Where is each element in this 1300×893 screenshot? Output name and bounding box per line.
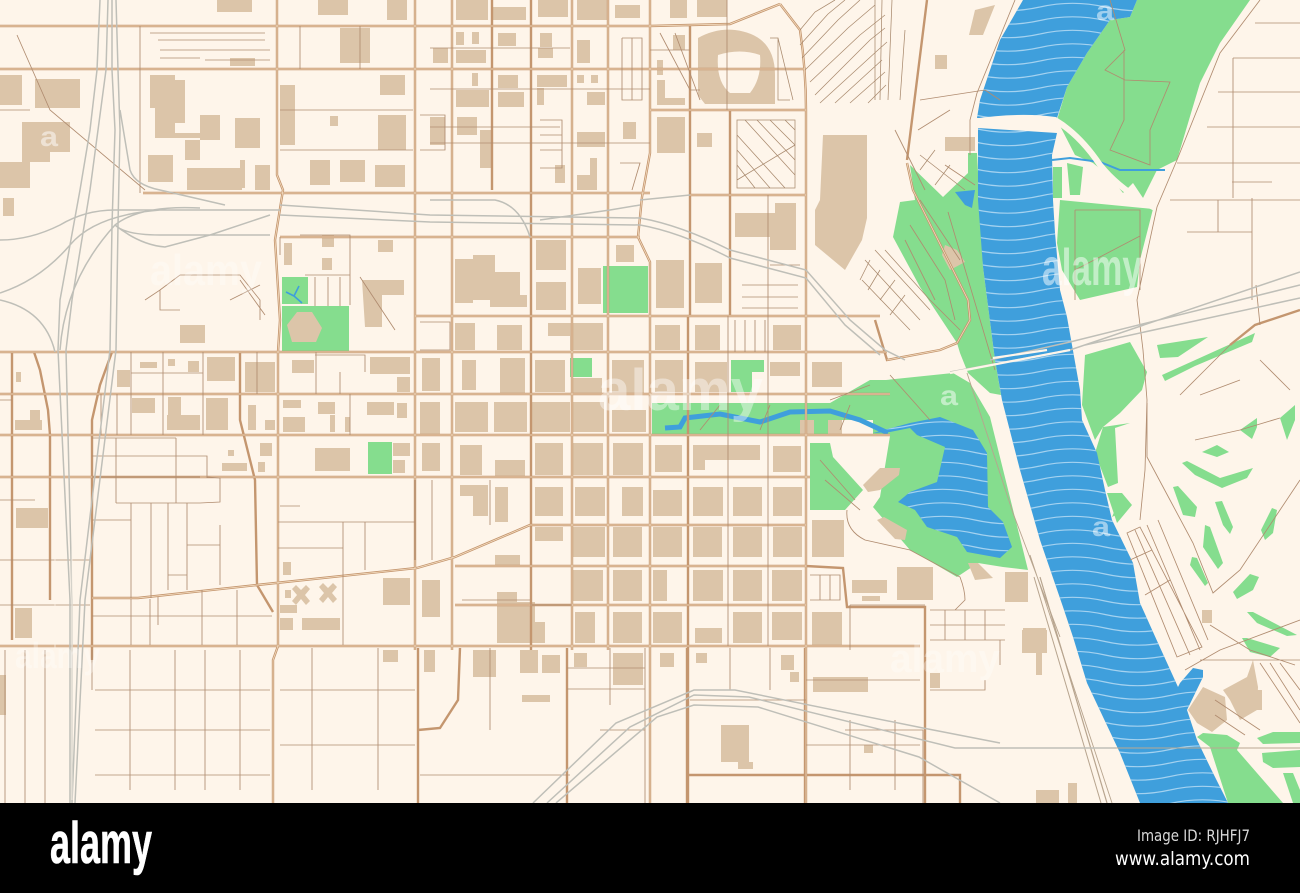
watermarks: a [40,121,58,152]
white bridges [55,118,1155,800]
streets inner fill [0,0,970,803]
footer bar [0,803,1300,893]
watermarks: alamy [890,637,1001,681]
watermarks: a [1092,511,1110,542]
alamy logo: alamy [50,811,152,876]
hatched subdivisions [737,0,965,330]
watermarks: a [940,380,958,411]
watermarks [15,0,1142,681]
website: www.alamy.com [1115,848,1250,870]
watermarks: alamy [15,635,100,676]
lake [873,417,1012,558]
watermarks: alamy [150,246,262,295]
watermarks: alamy [598,358,763,423]
parks [282,0,1300,803]
image id: Image ID: RJHFJ7 [1137,826,1250,845]
watermarks: alamy [1042,239,1142,297]
creek through downtown park [286,158,1165,433]
river [955,0,1228,803]
